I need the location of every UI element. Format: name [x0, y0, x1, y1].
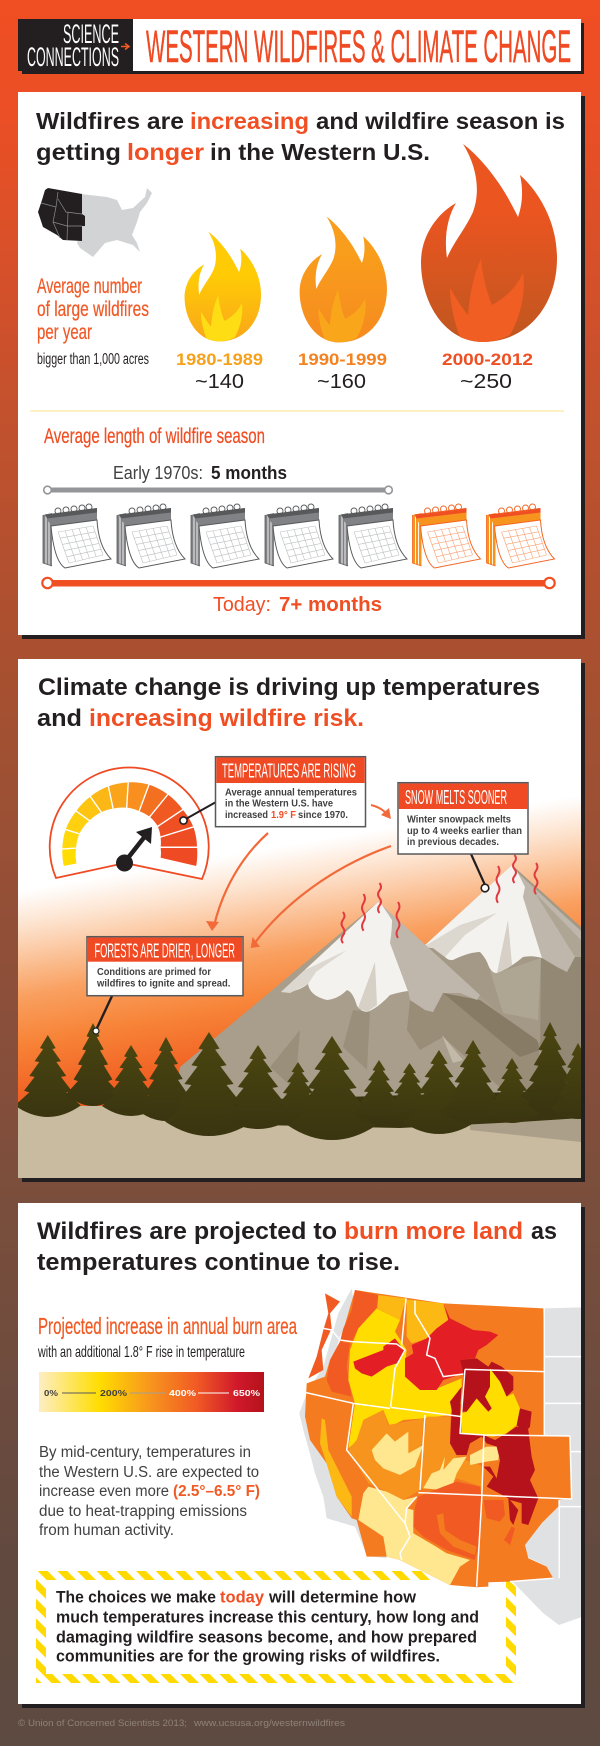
- bar: 5 months: [44, 486, 392, 494]
- legend: gradient scale: [39, 1372, 264, 1412]
- callout: snow melts sooner: in previous decades.: [407, 836, 499, 848]
- heading: [36, 108, 565, 165]
- callout pointer: gauge: [180, 802, 216, 824]
- label: today 7+ months: 7+ months: [279, 594, 382, 616]
- label: average number of large wildfires: Average number: [37, 275, 142, 298]
- legend: gradient scale: 200%: [100, 1388, 128, 1398]
- illustration: sky and mountains: [18, 802, 581, 1178]
- panel: climate change temperatures: [15, 659, 600, 1182]
- heading: and: [37, 705, 82, 732]
- callout: temperatures are rising: in the Western U.S. have: [225, 798, 333, 810]
- callout: snow melts sooner: up to 4 weeks earlier than: [407, 825, 522, 837]
- callout: the choices we make: much temperatures increase this century, how long and: [56, 1609, 479, 1627]
- decade counts: ~160: [317, 371, 366, 393]
- heading: increasing wildfire risk.: [89, 705, 364, 732]
- bar: 7+ months: [42, 578, 555, 588]
- callout: the choices we make: The choices we make: [56, 1589, 216, 1607]
- footer credit: © Union of Concerned Scientists 2013;: [18, 1718, 187, 1729]
- panel: projected burn area: [18, 1203, 585, 1708]
- arrow: temperatures to snow: [371, 805, 391, 819]
- callout: the choices we make: damaging wildfire seasons become, and how prepared: [56, 1628, 477, 1646]
- calendars: seven months: [43, 504, 554, 568]
- front mountain: [178, 902, 567, 1099]
- paragraph: due to heat-trapping emissions: [39, 1503, 247, 1520]
- decade counts: ~250: [460, 371, 512, 393]
- paragraph: the Western U.S. are expected to: [39, 1464, 259, 1481]
- callout: the choices we make: will determine how: [268, 1589, 416, 1607]
- callout: the choices we make: communities are for the growing risks of wildfires.: [56, 1648, 440, 1666]
- back mountain: [425, 865, 581, 1074]
- callout: temperatures are rising: increased: [225, 809, 268, 821]
- panel: wildfires increasing: [18, 92, 585, 639]
- icon: small flame 1980-1989: [185, 232, 261, 341]
- label: average length of wildfire season: Average length of wildfire season: [44, 424, 265, 448]
- label: average number of large wildfires: [37, 275, 149, 368]
- callout: temperatures are rising: [216, 757, 366, 827]
- decade counts: 2000-2012: [442, 350, 533, 369]
- ground: [18, 1106, 581, 1178]
- heading: Wildfires are projected to: [37, 1218, 337, 1245]
- callout: snow melts sooner: Winter snowpack melts: [407, 814, 511, 826]
- paragraph: increase even more: [39, 1483, 169, 1500]
- label: early 1970s 5 months: Early 1970s:: [113, 463, 203, 483]
- gauge needle: [116, 827, 152, 872]
- paragraph: from human activity.: [39, 1522, 174, 1539]
- heading: increasing: [190, 108, 309, 134]
- callout: the choices we make: [36, 1571, 516, 1683]
- footer credit: [18, 1718, 345, 1729]
- red heat squiggles: [342, 855, 538, 943]
- legend: gradient scale: 650%: [233, 1388, 261, 1398]
- label: early 1970s 5 months: 5 months: [211, 463, 287, 483]
- legend title: Projected increase in annual burn area: [38, 1313, 297, 1339]
- icon: medium flame 1990-1999: [300, 217, 387, 342]
- label: average number of large wildfires: bigger than 1,000 acres: [37, 351, 149, 368]
- panel: climate change temperatures: FORESTS ARE DRIER, LONGER: [94, 941, 235, 963]
- paragraph: [39, 1444, 260, 1539]
- callout: temperatures are rising: 1.9° F: [271, 809, 297, 821]
- legend subtitle: with an additional 1.8° F rise in temperature: [37, 1344, 245, 1361]
- callout pointer: forests: [93, 996, 112, 1034]
- icon: small arrow: [121, 44, 129, 50]
- callout: temperatures are rising: since 1970.: [298, 809, 348, 821]
- decade counts: 1980-1989: [176, 350, 263, 369]
- heading: longer: [127, 139, 204, 165]
- heading: [37, 674, 540, 732]
- heading: getting: [36, 139, 121, 165]
- heading: as: [531, 1218, 557, 1245]
- label: average number of large wildfires: of large wildfires: [37, 298, 149, 321]
- legend: gradient scale: 400%: [169, 1388, 197, 1398]
- heading: burn more land: [344, 1218, 523, 1245]
- heading: in the Western U.S.: [210, 139, 430, 165]
- callout: the choices we make: today: [220, 1589, 265, 1607]
- decade counts: [176, 350, 533, 393]
- header banner: [18, 19, 584, 74]
- callout: temperatures are rising: TEMPERATURES ARE RISING: [222, 761, 356, 783]
- arrow: temperatures to forests: [206, 833, 268, 931]
- heading: Climate change is driving up temperatures: [38, 674, 540, 701]
- icon: US map with western states highlighted: [38, 188, 152, 257]
- heading: [37, 1218, 557, 1276]
- label: today 7+ months: [213, 594, 382, 616]
- callout: forests are drier, longer: wildfires to ignite and spread.: [96, 978, 230, 990]
- heading: temperatures continue to rise.: [37, 1249, 400, 1276]
- gauge: temperature meter: [50, 768, 209, 879]
- paragraph: By mid-century, temperatures in: [39, 1444, 251, 1461]
- legend: gradient scale: 0%: [44, 1388, 58, 1398]
- arrow: snow to forests: [251, 846, 391, 948]
- callout pointer: snow: [471, 854, 489, 892]
- callout: forests are drier, longer: Conditions are primed for: [97, 966, 211, 978]
- map: projected burn area in western states: [299, 1288, 582, 1625]
- paragraph: (2.5°–6.5° F): [173, 1483, 260, 1500]
- label: early 1970s 5 months: [113, 463, 287, 483]
- callout: temperatures are rising: Average annual temperatures: [225, 787, 357, 799]
- brand: science connections: [27, 19, 119, 72]
- decade counts: ~140: [195, 371, 244, 393]
- header banner: SCIENCE: [63, 19, 119, 49]
- decade counts: 1990-1999: [298, 350, 387, 369]
- icon: large flame 2000-2012: [421, 144, 557, 342]
- callout: forests are drier, longer: [87, 937, 243, 996]
- header banner: CONNECTIONS: [27, 42, 119, 72]
- heading: and wildfire season is: [316, 108, 565, 134]
- pine trees: [15, 1022, 600, 1140]
- callout: snow melts sooner: [398, 783, 528, 854]
- label: average number of large wildfires: per year: [37, 321, 92, 344]
- footer credit: www.ucsusa.org/westernwildfires: [193, 1718, 345, 1729]
- label: today 7+ months: Today:: [213, 594, 271, 616]
- heading: Wildfires are: [36, 108, 184, 134]
